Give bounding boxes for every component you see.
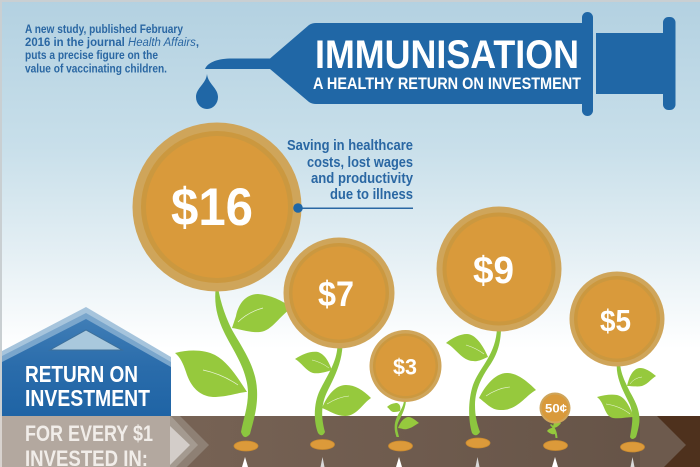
leaf left	[597, 395, 634, 418]
callout: healthcare savings: due to illness	[330, 186, 413, 203]
plant: $7	[295, 345, 371, 435]
leaf right	[479, 373, 536, 410]
coin: $7: $7	[318, 275, 354, 314]
panel: return on investment: INVESTMENT	[25, 385, 150, 411]
intro text: A new study, published February	[25, 24, 184, 36]
stem	[469, 328, 501, 435]
leaf left	[175, 351, 247, 397]
callout: healthcare savings: costs, lost wages	[307, 154, 413, 171]
stem	[215, 280, 257, 437]
roots row	[242, 457, 634, 467]
leaf right	[627, 368, 656, 386]
callout: healthcare savings	[287, 137, 414, 213]
leaf right	[398, 417, 419, 429]
plant: $9	[446, 328, 536, 435]
coin: $9	[436, 206, 562, 332]
leaf left	[295, 352, 332, 373]
stem	[617, 361, 640, 439]
leaf right	[553, 422, 561, 428]
plant: $3	[387, 401, 419, 437]
leaf right	[322, 385, 371, 416]
coin: 50 cents	[540, 392, 570, 424]
triangle emblem	[50, 330, 122, 350]
coin: $9: $9	[473, 250, 514, 292]
stem	[315, 345, 342, 435]
plant: 50 cents	[547, 422, 561, 438]
seed coins row	[234, 438, 644, 452]
intro text: puts a precise figure on the	[25, 50, 158, 62]
coin: 50 cents: 50¢	[545, 402, 567, 416]
callout: healthcare savings: Saving in healthcare	[287, 137, 413, 154]
label: FOR EVERY $1	[25, 421, 153, 446]
syringe flange	[582, 12, 593, 116]
leaf left	[547, 428, 556, 434]
intro text	[25, 24, 199, 76]
callout: healthcare savings: and productivity	[311, 170, 414, 187]
leaf right	[232, 294, 292, 332]
panel: return on investment	[2, 307, 171, 416]
coin: $7	[284, 238, 394, 348]
title: IMMUNISATION	[315, 33, 579, 77]
medicine drop	[196, 74, 218, 109]
leaf left	[446, 334, 488, 361]
ground band	[0, 416, 700, 467]
syringe barrel and nozzle	[205, 23, 582, 104]
coin: $3: $3	[393, 354, 417, 380]
coin: $16: $16	[171, 178, 253, 237]
panel: for every $1 invested	[0, 416, 209, 467]
plant: $16	[175, 280, 292, 437]
syringe plunger	[596, 33, 668, 94]
subtitle: A HEALTHY RETURN ON INVESTMENT	[313, 75, 581, 93]
plunger head	[663, 17, 676, 110]
coin: $5	[570, 272, 664, 366]
arrow	[170, 426, 190, 465]
syringe title banner	[196, 12, 676, 116]
intro text: 2016 in the journal Health Affairs,	[25, 37, 199, 49]
coin: $3	[370, 330, 442, 402]
coin: $5: $5	[600, 303, 631, 338]
heading: RETURN ON	[25, 361, 138, 387]
stem	[395, 401, 406, 437]
plant: $5	[597, 361, 656, 439]
intro text: value of vaccinating children.	[25, 64, 167, 76]
coin: $16	[132, 122, 302, 292]
leaf left	[387, 403, 400, 412]
stem	[550, 424, 558, 438]
